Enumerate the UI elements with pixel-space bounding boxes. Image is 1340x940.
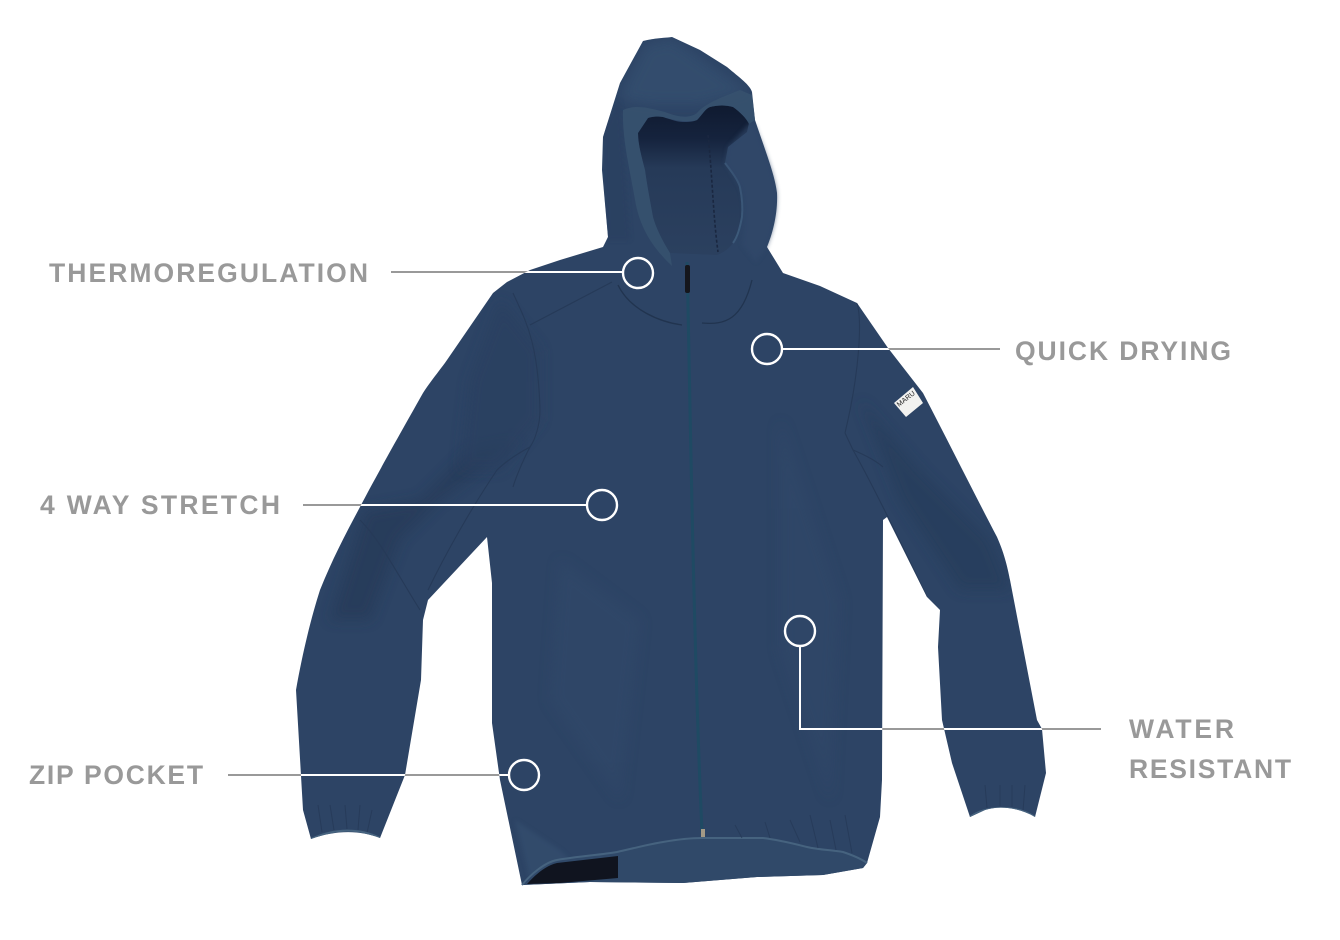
collar seam — [618, 280, 752, 325]
white parts of leaders over the jacket — [300, 271, 1042, 776]
leader: quick drying — [782, 348, 1000, 350]
inner hem lining — [527, 856, 618, 884]
left cuff gathers — [318, 805, 372, 833]
label: water resistant: WATER — [1129, 714, 1234, 744]
leader: water resistant — [800, 646, 1101, 729]
hood opening — [638, 106, 749, 255]
label: water resistant: RESISTANT — [1129, 754, 1291, 784]
label: zip pocket: ZIP POCKET — [29, 760, 203, 790]
right cuff gathers — [985, 785, 1025, 811]
hem gather line — [522, 838, 867, 885]
marker circles — [509, 258, 815, 790]
marker: quick drying — [752, 334, 782, 364]
hood brim band — [623, 90, 755, 266]
leader: thermoregulation — [391, 271, 623, 273]
marker: zip pocket — [509, 760, 539, 790]
zipper pull — [685, 265, 690, 293]
leader: zip pocket — [228, 774, 509, 776]
jacket shading and folds — [330, 38, 1010, 880]
zipper — [687, 262, 702, 832]
hood opening rim — [725, 163, 742, 243]
marker: thermoregulation — [623, 258, 653, 288]
hood right panel — [725, 124, 777, 262]
jacket — [296, 37, 1046, 885]
leader: 4 way stretch — [303, 504, 587, 506]
lower back panel — [523, 838, 867, 885]
sleeve seams — [360, 282, 927, 610]
hood inner seam — [708, 135, 718, 252]
label: water resistant — [1129, 714, 1291, 784]
marker: 4 way stretch — [587, 490, 617, 520]
hem gathers — [735, 815, 852, 853]
sleeve badge — [894, 387, 923, 417]
label: quick drying: QUICK DRYING — [1015, 336, 1231, 366]
zipper bottom stop — [701, 829, 705, 837]
label: 4 way stretch: 4 WAY STRETCH — [40, 490, 280, 520]
jacket silhouette — [296, 37, 1046, 885]
left cuff edge — [311, 831, 380, 839]
marker: water resistant — [785, 616, 815, 646]
leader lines — [228, 272, 1101, 775]
label: thermoregulation: THERMOREGULATION — [49, 258, 368, 288]
right cuff edge — [970, 808, 1035, 817]
sleeve badge: MARU — [896, 390, 917, 409]
